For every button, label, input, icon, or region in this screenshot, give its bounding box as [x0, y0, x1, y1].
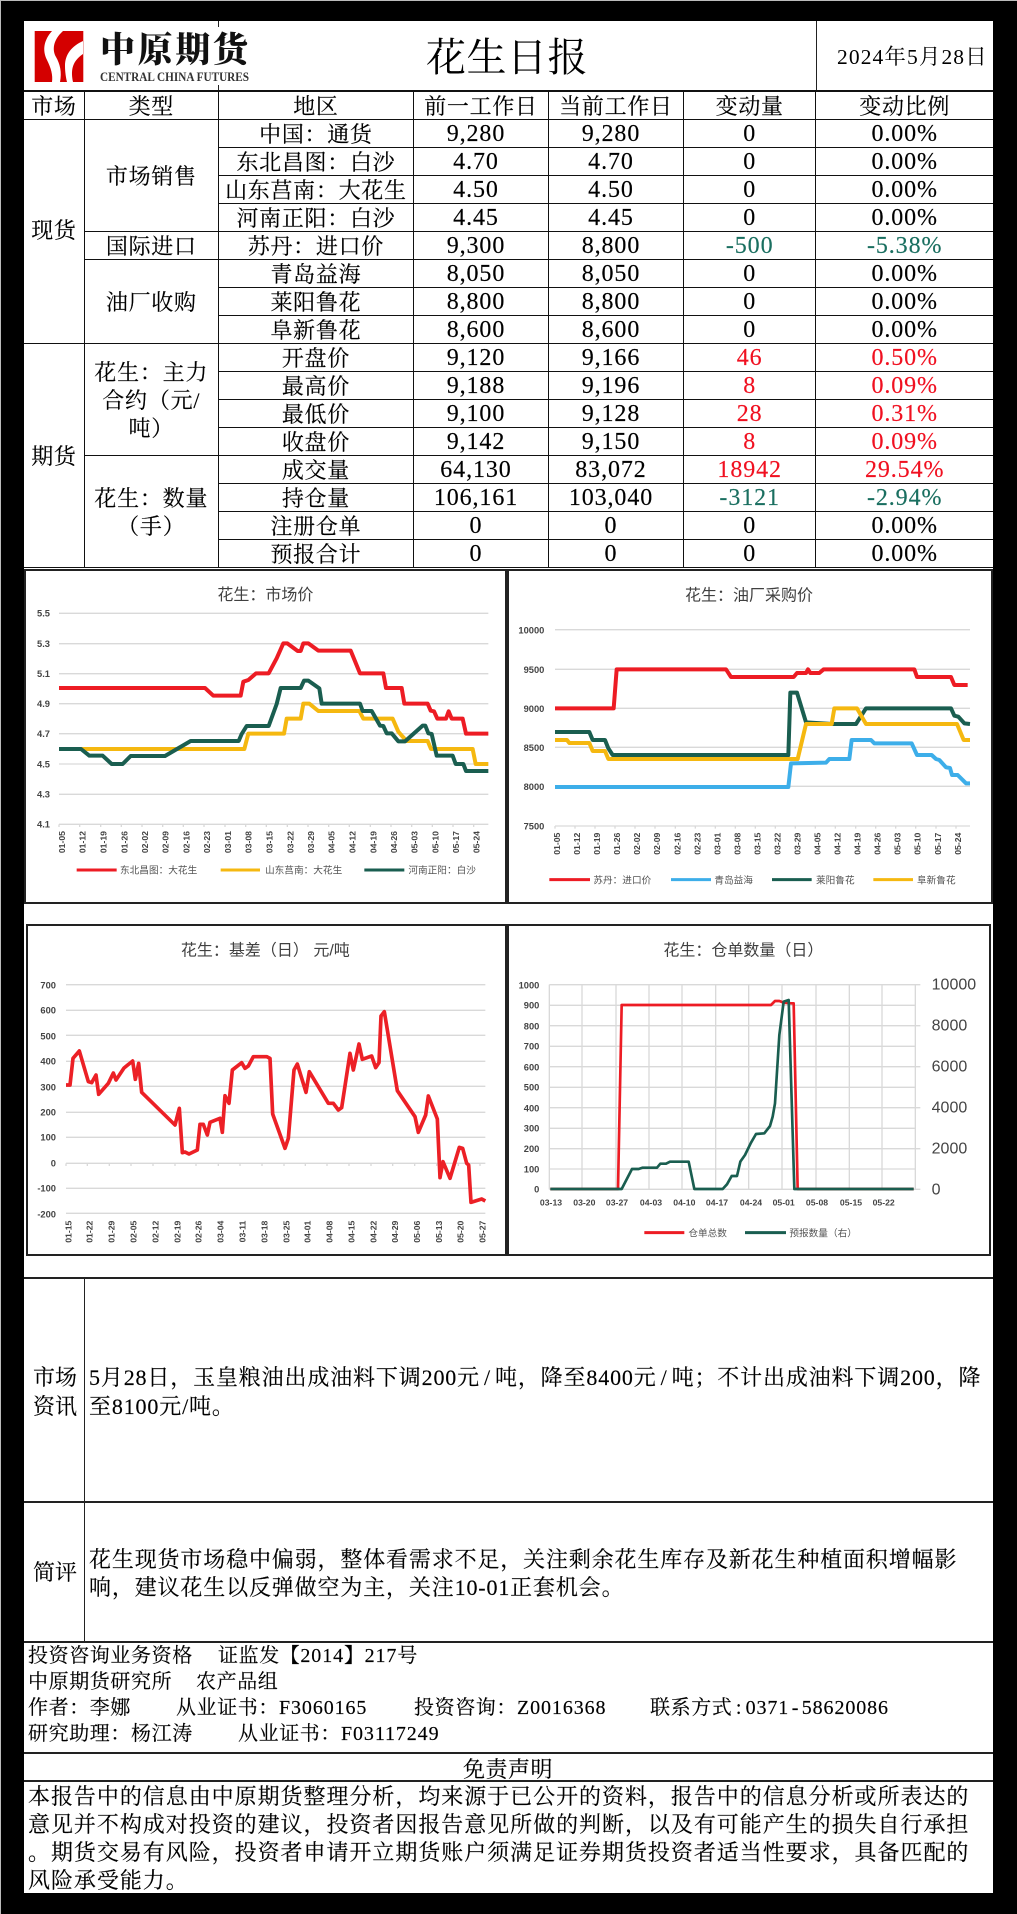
right y axis labels: 4000 [932, 1099, 967, 1116]
data table: 9,150 [582, 429, 640, 455]
line: 预报数量 [550, 1000, 914, 1189]
data table: 9,142 [447, 429, 505, 455]
data table: 当前工作日 [559, 94, 673, 119]
data table: 106,161 [434, 485, 518, 511]
y axis labels: 9000 [524, 704, 544, 714]
data table: 变动量 [716, 94, 784, 119]
x axis date labels: 04-08 [324, 1220, 334, 1243]
data table: 8,600 [447, 317, 505, 343]
line: 东北昌图 [59, 643, 488, 734]
data table: 8,050 [447, 261, 505, 287]
x axis date labels: 04-24 [740, 1197, 762, 1207]
y axis labels: 5.1 [37, 669, 50, 679]
x axis date labels: 05-03 [410, 831, 420, 853]
line: 阜新鲁花 [555, 708, 970, 759]
x axis date labels: 05-03 [893, 832, 903, 855]
analyst credentials block: 投资咨询：Z0016368 [414, 1697, 606, 1719]
data table: 9,128 [582, 401, 640, 427]
y axis labels [518, 625, 544, 832]
data table: 类型 [129, 94, 174, 119]
data table: （手） [117, 514, 186, 538]
data table: 0 [743, 149, 756, 175]
x axis date labels: 01-05 [552, 832, 562, 855]
data table: 合约（元/ [102, 388, 200, 412]
x axis date labels: 05-10 [430, 831, 440, 853]
data table: 29.54% [865, 457, 944, 483]
data table: 0.00% [871, 121, 938, 147]
data table: -5.38% [867, 233, 942, 259]
x axis date labels: 05-08 [806, 1197, 828, 1207]
data table: 0 [743, 121, 756, 147]
x axis date labels: 02-16 [672, 832, 682, 855]
line: 河南正阳 [59, 681, 488, 771]
line: basis [66, 1012, 485, 1202]
data table: 0 [743, 289, 756, 315]
data table: 0 [743, 541, 756, 567]
x axis date labels [552, 832, 963, 855]
x axis date labels: 04-10 [673, 1197, 696, 1207]
left y axis labels: 900 [524, 1001, 539, 1011]
x axis date labels: 05-10 [913, 832, 923, 855]
market news section label: 市场 [33, 1365, 77, 1390]
legend [77, 865, 476, 877]
y axis labels: 4.3 [37, 790, 50, 800]
y axis labels: 100 [40, 1133, 56, 1143]
data table: 0.00% [871, 205, 938, 231]
y axis labels: 0 [51, 1159, 56, 1169]
x axis date labels: 05-15 [840, 1197, 862, 1207]
disclaimer heading: 免责声明 [463, 1757, 553, 1782]
right y axis labels: 6000 [932, 1059, 967, 1076]
analyst credentials block [28, 1644, 889, 1745]
x axis date labels [63, 1220, 487, 1243]
data table: 0 [605, 541, 617, 567]
left y axis labels: 100 [524, 1165, 539, 1175]
y axis labels: 5.5 [37, 609, 50, 619]
y axis labels: 4.7 [37, 729, 50, 739]
data table: 0.00% [871, 541, 938, 567]
y axis labels: 7500 [524, 822, 544, 832]
legend: 青岛益海 [714, 874, 753, 886]
panel: warehouse receipt chart [507, 924, 991, 1256]
y axis labels: 300 [40, 1082, 56, 1092]
y axis labels: 700 [40, 981, 56, 991]
x axis date labels: 04-05 [327, 831, 337, 853]
line: 山东莒南 [59, 704, 488, 764]
data table: 0 [470, 541, 482, 567]
y axis labels: 4.5 [37, 759, 50, 769]
data table: 东北昌图：白沙 [236, 150, 395, 175]
x axis date labels: 04-19 [853, 832, 863, 855]
data table: 4.45 [453, 205, 499, 231]
x axis date labels: 02-02 [632, 832, 642, 855]
analyst credentials block: 投资咨询业务资格 [28, 1645, 193, 1667]
chart title: 花生：基差（日） 元/吨 [181, 942, 350, 960]
data table: 0 [743, 317, 756, 343]
disclaimer text: 本报告中的信息由中原期货整理分析，均来源于已公开的资料，报告中的信息分析或所表达的 [28, 1784, 969, 1809]
analyst credentials block: 作者：李娜 [28, 1697, 131, 1719]
data table: 9,280 [447, 121, 505, 147]
data table [24, 90, 993, 568]
x axis date labels: 04-26 [873, 832, 883, 855]
x axis date labels: 01-19 [99, 831, 109, 853]
data table: 最低价 [282, 402, 350, 427]
x axis date labels: 03-04 [216, 1220, 226, 1243]
legend: 预报数量（右） [789, 1227, 857, 1239]
data table: -2.94% [867, 485, 942, 511]
panel: basis chart [26, 924, 507, 1256]
data table: 0 [605, 513, 617, 539]
left y axis labels: 1000 [519, 980, 539, 990]
y axis labels: 10000 [518, 625, 544, 635]
x axis date labels: 02-23 [202, 831, 212, 853]
legend: 河南正阳：白沙 [408, 865, 476, 877]
x axis date labels [540, 1197, 895, 1207]
data table: 期货 [31, 444, 77, 469]
x axis date labels: 03-29 [792, 832, 802, 855]
x axis date labels: 01-12 [572, 832, 582, 855]
x axis date labels: 04-22 [368, 1220, 378, 1243]
data table: 4.70 [453, 149, 499, 175]
comment section label: 简评 [33, 1560, 77, 1585]
data table: 0.00% [871, 261, 938, 287]
data table: 青岛益海 [270, 262, 361, 287]
legend [549, 874, 956, 886]
analyst credentials block: 从业证书：F3060165 [176, 1697, 367, 1719]
data table: 18942 [717, 457, 782, 483]
disclaimer text [28, 1784, 969, 1893]
left y axis labels [519, 980, 539, 1195]
x axis date labels: 01-22 [85, 1220, 95, 1243]
x axis date labels: 01-26 [612, 832, 622, 855]
data table: 预报合计 [270, 542, 361, 567]
x axis date labels: 01-05 [57, 831, 67, 853]
x axis date labels: 03-20 [573, 1197, 596, 1207]
data table: 0.00% [871, 317, 938, 343]
left y axis labels: 700 [524, 1042, 539, 1052]
right y axis labels: 0 [932, 1182, 941, 1199]
x axis date labels: 01-15 [63, 1220, 73, 1243]
y axis labels: 5.3 [37, 639, 50, 649]
y axis labels: 400 [40, 1057, 56, 1067]
y axis labels: 8500 [524, 743, 544, 753]
line: 仓单总数 [550, 1001, 914, 1189]
analyst credentials block: 证监发【2014】217号 [218, 1645, 418, 1667]
x axis date labels: 04-05 [812, 832, 822, 855]
x axis date labels: 04-12 [347, 831, 357, 853]
data table: 前一工作日 [424, 94, 538, 119]
data table: 0.00% [871, 513, 938, 539]
x axis date labels: 03-08 [732, 832, 742, 855]
analyst credentials block: 从业证书：F03117249 [238, 1723, 439, 1745]
market news text: 5月28日，玉皇粮油出成油料下调200元/吨，降至8400元/吨；不计出成油料下调200，降 [89, 1365, 981, 1390]
data table: 0.09% [871, 429, 938, 455]
x axis date labels: 04-19 [368, 831, 378, 853]
panel: oil mill purchase price chart [507, 569, 993, 904]
chart title: 花生：仓单数量（日） [663, 942, 823, 960]
y axis labels [37, 981, 56, 1220]
left y axis labels: 500 [524, 1083, 539, 1093]
data table: 8 [743, 429, 756, 455]
disclaimer text: 。期货交易有风险，投资者申请开立期货账户须满足证券期货投资者适当性要求，具备匹配的 [28, 1840, 969, 1865]
left y axis labels: 400 [524, 1104, 539, 1114]
comment text: 花生现货市场稳中偏弱，整体看需求不足，关注剩余花生库存及新花生种植面积增幅影 [89, 1547, 957, 1572]
data table: 持仓量 [282, 486, 350, 511]
x axis date labels: 01-19 [592, 832, 602, 855]
x axis date labels: 03-01 [223, 831, 233, 853]
data table: -500 [726, 233, 773, 259]
x axis date labels: 01-26 [119, 831, 129, 853]
data table: 莱阳鲁花 [270, 290, 361, 315]
disclaimer text: 风险承受能力。 [28, 1868, 189, 1893]
x axis date labels: 05-13 [434, 1220, 444, 1243]
x axis date labels: 04-12 [832, 832, 842, 855]
data table: 0.00% [871, 289, 938, 315]
data table: 市场 [31, 94, 77, 119]
line: 苏丹进口价 [555, 669, 968, 708]
x axis date labels: 03-22 [285, 831, 295, 853]
data table: 0.00% [871, 177, 938, 203]
x axis date labels: 04-29 [390, 1220, 400, 1243]
left y axis labels: 0 [534, 1185, 539, 1195]
market news section label: 资讯 [33, 1394, 77, 1419]
report date: 2024年5月28日 [837, 45, 988, 69]
data table: 开盘价 [282, 346, 350, 371]
data table: 油厂收购 [106, 290, 197, 315]
x axis date labels: 02-26 [193, 1220, 203, 1243]
x axis date labels: 02-16 [181, 831, 191, 853]
data table: 9,166 [582, 345, 640, 371]
x axis date labels: 02-02 [140, 831, 150, 853]
x axis date labels: 04-01 [303, 1220, 313, 1243]
x axis date labels: 05-01 [773, 1197, 795, 1207]
data table: 山东莒南：大花生 [225, 178, 407, 203]
x axis date labels: 03-15 [752, 832, 762, 855]
x axis date labels: 03-27 [606, 1197, 628, 1207]
data table: 4.70 [588, 149, 634, 175]
legend: 阜新鲁花 [917, 874, 956, 886]
data table: 0.50% [871, 345, 938, 371]
x axis date labels: 01-12 [78, 831, 88, 853]
data table: 46 [737, 345, 763, 371]
x axis date labels: 05-20 [456, 1220, 466, 1243]
data table: 9,100 [447, 401, 505, 427]
market news text: 至8100元/吨。 [89, 1394, 235, 1419]
analyst credentials block: 联系方式:0371-58620086 [650, 1697, 889, 1719]
x axis date labels: 05-17 [451, 831, 461, 853]
right y axis labels [932, 977, 976, 1199]
y axis labels: 8000 [524, 782, 544, 792]
data table: 9,300 [447, 233, 505, 259]
logo: Central China Futures [34, 28, 252, 84]
x axis date labels: 04-15 [346, 1220, 356, 1243]
x axis date labels: 02-09 [652, 832, 662, 855]
y axis labels: 4.1 [37, 820, 50, 830]
analyst credentials block: 研究助理：杨江涛 [28, 1723, 193, 1745]
data table: 花生：数量 [94, 486, 208, 510]
left y axis labels: 800 [524, 1021, 539, 1031]
y axis labels: 600 [40, 1006, 56, 1016]
data table: 8,800 [582, 289, 640, 315]
right y axis labels: 2000 [932, 1140, 967, 1157]
data table: 9,196 [582, 373, 640, 399]
data table: 8,800 [582, 233, 640, 259]
disclaimer text: 意见并不构成对投资的建议，投资者因报告意见所做的判断，以及有可能产生的损失自行承担 [28, 1812, 969, 1837]
legend: 山东莒南：大花生 [265, 865, 343, 877]
x axis date labels: 02-19 [172, 1220, 182, 1243]
x axis date labels: 04-26 [389, 831, 399, 853]
data table: 8 [743, 373, 756, 399]
data table: 4.45 [588, 205, 634, 231]
left y axis labels: 200 [524, 1144, 539, 1154]
data table: 变动比例 [859, 94, 950, 119]
data table: -3121 [719, 485, 780, 511]
data table: 中国：通货 [259, 122, 373, 147]
legend: 仓单总数 [688, 1227, 727, 1239]
x axis date labels: 03-08 [244, 831, 254, 853]
market news section label [33, 1365, 77, 1419]
data table: 河南正阳：白沙 [236, 206, 395, 231]
data table: 吨） [128, 416, 174, 440]
x axis date labels: 03-11 [237, 1220, 247, 1242]
right y axis labels: 10000 [932, 977, 976, 994]
left y axis labels: 300 [524, 1124, 539, 1134]
data table: 国际进口 [106, 234, 197, 259]
x axis date labels: 03-29 [306, 831, 316, 853]
analyst credentials block: 农产品组 [196, 1671, 278, 1693]
y axis labels: 9500 [524, 665, 544, 675]
comment text [89, 1547, 957, 1600]
x axis date labels: 03-01 [712, 832, 722, 855]
x axis date labels: 02-23 [692, 832, 702, 855]
data table: 64,130 [440, 457, 512, 483]
comment text: 响，建议花生以反弹做空为主，关注10-01正套机会。 [89, 1575, 624, 1600]
x axis date labels: 03-13 [540, 1197, 562, 1207]
x axis date labels: 02-12 [150, 1220, 160, 1243]
legend: 东北昌图：大花生 [120, 865, 198, 877]
x axis date labels [57, 831, 482, 853]
y axis labels: 200 [40, 1108, 56, 1118]
y axis labels: -200 [37, 1210, 56, 1220]
data table: 苏丹：进口价 [248, 234, 384, 259]
market news text [89, 1365, 981, 1419]
x axis date labels: 03-22 [772, 832, 782, 855]
x axis date labels: 01-29 [107, 1220, 117, 1243]
x axis date labels: 04-17 [706, 1197, 728, 1207]
y axis labels: 500 [40, 1032, 56, 1042]
data table: 收盘价 [282, 430, 350, 455]
x axis date labels: 05-17 [933, 832, 943, 855]
right y axis labels: 8000 [932, 1018, 967, 1035]
analyst credentials block: 中原期货研究所 [28, 1671, 172, 1693]
left y axis labels: 600 [524, 1063, 539, 1073]
data table: 0.00% [871, 149, 938, 175]
legend: 莱阳鲁花 [816, 874, 855, 886]
data table: 103,040 [569, 485, 653, 511]
data table: 4.50 [588, 177, 634, 203]
x axis date labels: 04-03 [640, 1197, 662, 1207]
y axis labels: -100 [37, 1184, 56, 1194]
data table: 28 [737, 401, 763, 427]
data table: 8,600 [582, 317, 640, 343]
data table: 9,280 [582, 121, 640, 147]
data table: 8,800 [447, 289, 505, 315]
panel: market price chart [24, 569, 507, 904]
data table: 83,072 [575, 457, 647, 483]
title: 花生日报 [426, 35, 588, 80]
y axis labels: 4.9 [37, 699, 50, 709]
x axis date labels: 05-06 [412, 1220, 422, 1243]
x axis date labels: 05-27 [477, 1220, 487, 1243]
data table: 市场销售 [106, 164, 197, 189]
x axis date labels: 05-24 [953, 832, 963, 855]
data table: 注册仓单 [270, 514, 361, 539]
chart title: 花生：油厂采购价 [685, 587, 813, 605]
y axis labels [37, 609, 50, 830]
data table: 0 [470, 513, 482, 539]
data table: 8,050 [582, 261, 640, 287]
x axis date labels: 05-24 [472, 831, 482, 853]
x axis date labels: 02-09 [161, 831, 171, 853]
data table: 0.31% [871, 401, 938, 427]
data table: 现货 [31, 218, 77, 242]
data table: 9,188 [447, 373, 505, 399]
line: 青岛益海 [555, 740, 970, 787]
x axis date labels: 03-25 [281, 1220, 291, 1243]
x axis date labels: 05-22 [873, 1197, 895, 1207]
data table: 4.50 [453, 177, 499, 203]
data table: 地区 [293, 94, 339, 119]
x axis date labels: 03-15 [264, 831, 274, 853]
data table: 0 [743, 205, 756, 231]
legend [644, 1227, 857, 1239]
data table: 0 [743, 261, 756, 287]
data table: 最高价 [282, 374, 350, 399]
data table: 0 [743, 177, 756, 203]
data table: 成交量 [282, 458, 350, 483]
line: 莱阳鲁花 [555, 693, 970, 755]
data table: 花生：主力 [94, 360, 208, 384]
legend: 苏丹：进口价 [593, 874, 652, 886]
data table: 9,120 [447, 345, 505, 371]
x axis date labels: 02-05 [128, 1220, 138, 1243]
data table: 0 [743, 513, 756, 539]
chart title: 花生：市场价 [217, 586, 313, 604]
data table: 0.09% [871, 373, 938, 399]
x axis date labels: 03-18 [259, 1220, 269, 1243]
data table: 阜新鲁花 [270, 318, 361, 343]
